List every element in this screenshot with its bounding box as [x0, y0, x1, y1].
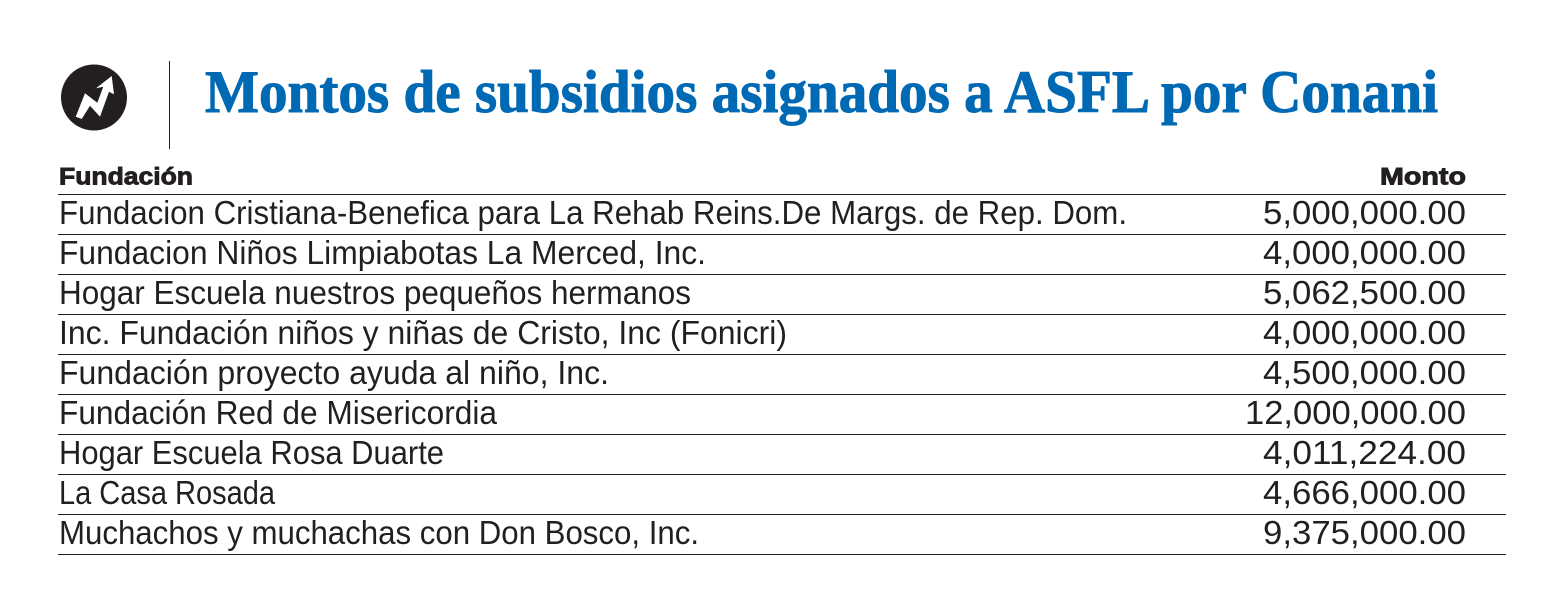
row 2 [59, 234, 1466, 271]
row 9: Muchachos y muchachas con Don Bosco, Inc. [59, 514, 699, 551]
row 8: La Casa Rosada [59, 474, 276, 511]
row 9: 9,375,000.00 [1263, 514, 1466, 551]
row 6 [59, 394, 1466, 431]
row 6: 12,000,000.00 [1245, 394, 1466, 431]
row 2: Fundacion Niños Limpiabotas La Merced, Inc. [59, 234, 706, 271]
row 2: 4,000,000.00 [1263, 234, 1466, 271]
row 7: 4,011,224.00 [1263, 434, 1466, 471]
column header: Monto: Monto [1380, 164, 1466, 190]
row 4: Inc. Fundación niños y niñas de Cristo, Inc (Fonicri) [59, 314, 787, 351]
vertical divider [169, 61, 170, 149]
row 5 [59, 354, 1466, 391]
icon: black circle with rising arrow [61, 64, 127, 130]
row 3: 5,062,500.00 [1263, 274, 1466, 311]
row 1: 5,000,000.00 [1263, 194, 1466, 231]
row 7: Hogar Escuela Rosa Duarte [59, 434, 444, 471]
row 6: Fundación Red de Misericordia [59, 394, 498, 431]
row 4 [59, 314, 1466, 351]
row 8 [59, 474, 1466, 511]
row 5: Fundación proyecto ayuda al niño, Inc. [59, 354, 609, 391]
row 3 [59, 274, 1466, 311]
row rules [58, 194, 1506, 555]
row 7 [59, 434, 1466, 471]
row 4: 4,000,000.00 [1263, 314, 1466, 351]
row 3: Hogar Escuela nuestros pequeños hermanos [59, 274, 691, 311]
row 9 [59, 514, 1466, 551]
title: Montos de subsidios asignados a ASFL por Conani [205, 59, 1438, 125]
row 5: 4,500,000.00 [1263, 354, 1466, 391]
table [58, 164, 1506, 555]
row 1: Fundacion Cristiana-Benefica para La Rehab Reins.De Margs. de Rep. Dom. [59, 194, 1127, 231]
column header: Fundación: Fundación [59, 164, 193, 190]
row 8: 4,666,000.00 [1263, 474, 1466, 511]
